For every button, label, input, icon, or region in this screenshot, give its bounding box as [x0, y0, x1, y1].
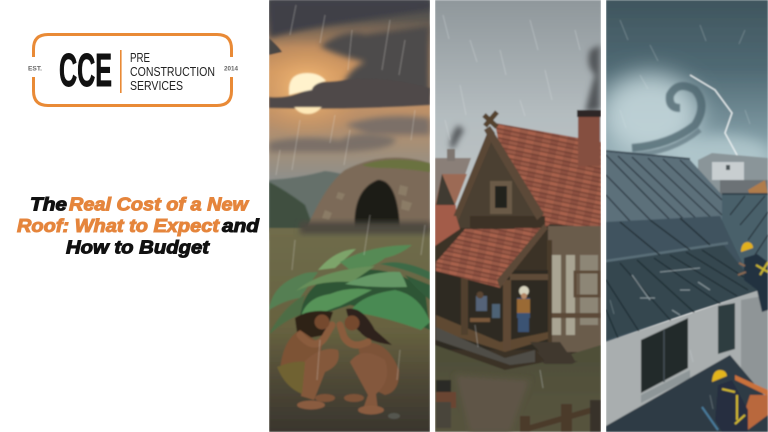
left figure: [277, 311, 339, 410]
panel: modern standing-seam roof in storm: [600, 0, 768, 432]
muddy yard: [435, 345, 601, 432]
chimney smoke: [450, 45, 600, 148]
porch tiled roof: [436, 224, 550, 288]
brick chimney: [577, 110, 601, 166]
left roof: [435, 216, 460, 246]
distant mountains: [269, 171, 345, 240]
sunset sky: [269, 0, 430, 225]
lower roof and scaffold: [606, 355, 768, 432]
swirling tornado: [625, 86, 702, 155]
two crouching figures: [277, 308, 400, 419]
sun: [289, 73, 326, 114]
right figure: [340, 308, 399, 414]
white wall with windows: [606, 290, 768, 432]
title: How to Budget: [66, 238, 210, 258]
porch: [436, 270, 548, 365]
timber gable: [447, 112, 545, 233]
upper metal roof panel: [606, 149, 723, 223]
rain streaks: [443, 15, 580, 388]
logo: CCE Pre Construction Services: CONSTRUCTION: [130, 65, 215, 79]
main dark metal roof: [606, 216, 760, 342]
logo: CCE Pre Construction Services: 2014: [224, 66, 239, 72]
worker on scaffold: [702, 370, 748, 432]
barrels: [436, 380, 456, 428]
steps: [530, 342, 578, 364]
leaf canopy: [269, 245, 430, 334]
overcast sky: [435, 0, 601, 230]
title: [17, 194, 260, 258]
wooden fence: [520, 400, 601, 432]
house wall: [547, 226, 601, 355]
distant houses: [698, 153, 768, 195]
house backing: [435, 222, 578, 371]
ground: [269, 228, 430, 432]
title: and: [222, 216, 260, 236]
panel: medieval timber house: [435, 0, 601, 432]
logo: CCE Pre Construction Services: SERVICES: [130, 79, 183, 93]
logo: CCE Pre Construction Services: EST.: [28, 66, 42, 72]
storm sky: [600, 0, 768, 175]
figures on the porch: [476, 286, 530, 332]
rain streaks: [276, 5, 425, 380]
title: The: [30, 194, 67, 214]
background village houses: [435, 149, 471, 216]
rain streaks: [610, 20, 750, 409]
cave: [305, 158, 430, 232]
panel: prehistoric shelter under leaves: [269, 0, 430, 432]
title: Real Cost of a New: [69, 194, 249, 214]
title: Roof: What to Expect: [17, 216, 220, 236]
worker on roof: [738, 242, 768, 312]
lightning bolt: [689, 74, 738, 156]
upper roof: [495, 123, 601, 232]
logo: CCE Pre Construction Services: CCE: [59, 44, 112, 96]
logo: CCE Pre Construction Services: [28, 34, 239, 106]
side metal roof: [721, 192, 768, 265]
logo: CCE Pre Construction Services: PRE: [130, 51, 150, 65]
